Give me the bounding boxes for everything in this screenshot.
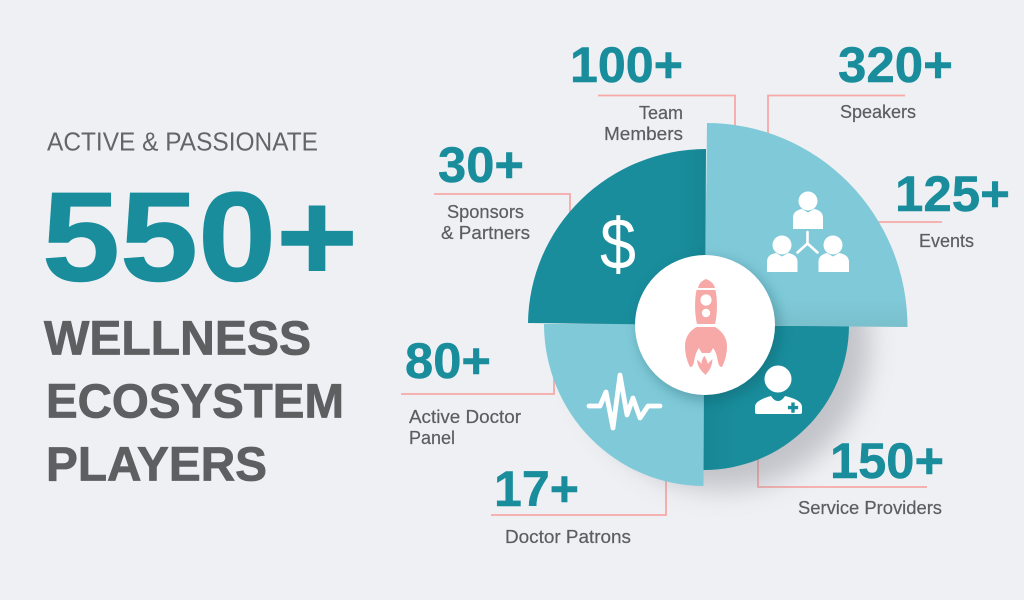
stat: active doctor panel: Panel [409, 428, 455, 448]
heading: players: PLAYERS [46, 438, 267, 492]
stat: service providers [798, 433, 944, 518]
stat: speakers: Speakers [840, 102, 916, 122]
centre circle shadow [639, 260, 779, 400]
icon: team network [767, 192, 849, 272]
stat: doctor patrons [494, 461, 631, 547]
stat: events: 125+ [895, 166, 1010, 222]
icon: dollar sign: $ [600, 205, 636, 285]
stat: service providers: Service Providers [798, 498, 942, 518]
stat: active doctor panel: Active Doctor [409, 407, 521, 427]
stat: doctor patrons: Doctor Patrons [505, 527, 631, 547]
stat: doctor patrons: 17+ [494, 461, 579, 517]
heading: ecosystem: ECOSYSTEM [46, 376, 344, 428]
stat: team members [570, 37, 683, 144]
stat: active doctor panel: 80+ [405, 333, 491, 389]
stat: sponsors and partners [438, 137, 530, 243]
heading: wellness: WELLNESS [44, 312, 311, 366]
stat: events: Events [919, 231, 974, 251]
stat: sponsors and partners: Sponsors [447, 202, 524, 222]
stat: sponsors and partners: & Partners [441, 223, 530, 243]
stat: speakers [838, 37, 953, 122]
icon: doctor [755, 366, 802, 414]
left heading block [42, 128, 358, 492]
stat: team members: Members [604, 124, 683, 144]
centre circle [635, 255, 775, 395]
radial chart [528, 123, 908, 490]
segment: sponsors [528, 149, 706, 325]
shadow under chart [574, 194, 870, 490]
stat: team members: Team [639, 103, 683, 123]
leader lines [401, 96, 942, 515]
stat: sponsors and partners: 30+ [438, 137, 524, 193]
stat: events [895, 166, 1010, 251]
segment: speakers and events [705, 123, 908, 327]
segment: service providers [704, 326, 849, 470]
kicker: active and passionate: ACTIVE & PASSIONATE [47, 128, 318, 156]
segment: doctor patrons [544, 324, 704, 486]
stat: speakers: 320+ [838, 37, 953, 93]
big number 550+: 550+ [42, 166, 358, 308]
icon: rocket [685, 279, 727, 375]
stat: active doctor panel [405, 333, 521, 448]
icon: pulse line [589, 375, 660, 428]
stat: service providers: 150+ [830, 433, 944, 489]
stat: team members: 100+ [570, 37, 683, 93]
